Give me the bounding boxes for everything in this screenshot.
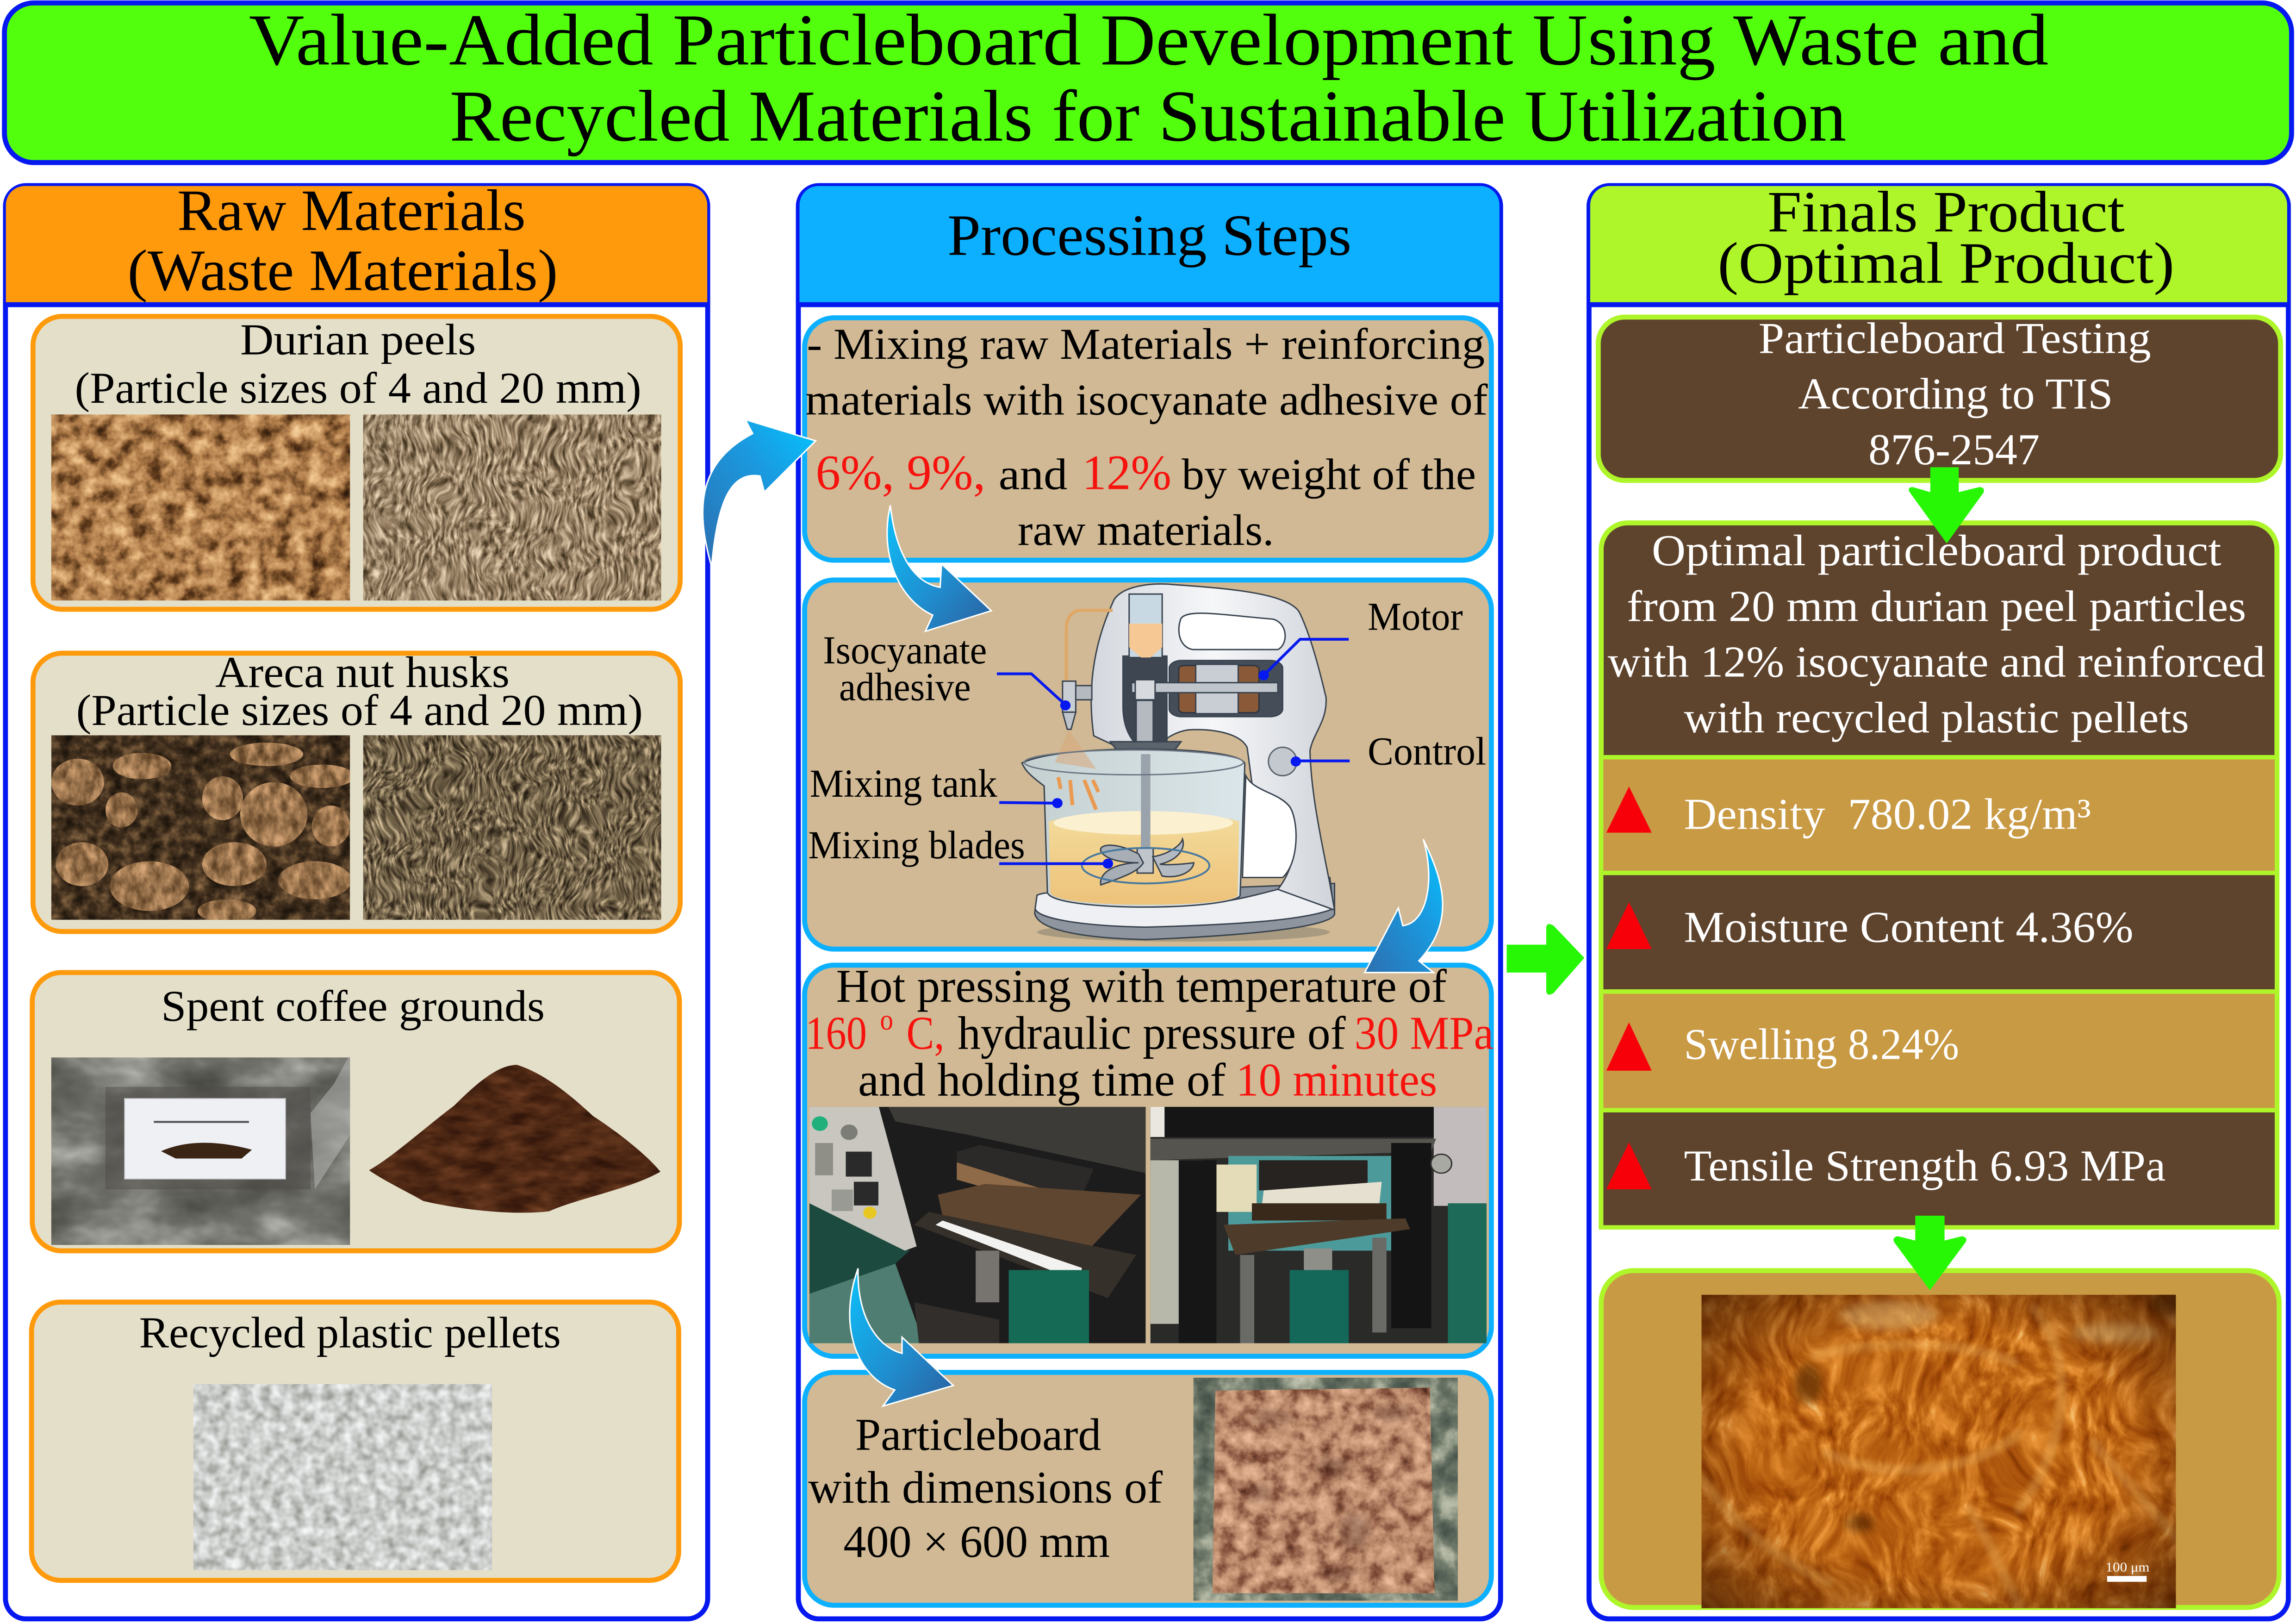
card: particleboard result (805, 1372, 1491, 1605)
mixer labels: adhesive (839, 665, 971, 709)
photo: microstructure (1701, 1290, 2184, 1608)
card: mixing text: - Mixing raw Materials + reinforcing (807, 319, 1485, 369)
card: mixing text: by weight of the (1182, 450, 1476, 499)
card: spent coffee grounds (32, 973, 679, 1251)
particleboard text: Particleboard (855, 1410, 1101, 1460)
card: durian peels: Durian peels (240, 315, 476, 364)
mixer labels: Mixing tank (810, 762, 997, 806)
scale bar: 100 μm (2106, 1561, 2150, 1575)
photo: hot press left (809, 1107, 1145, 1343)
card: mixing text: and (999, 450, 1067, 499)
title banner (5, 0, 2291, 162)
arrow: processing to final product (1507, 924, 1584, 995)
optimal product text: with recycled plastic pellets (1684, 693, 2189, 742)
photo: packaged coffee (51, 1055, 350, 1245)
hot pressing text: 30 MPa (1355, 1007, 1493, 1059)
card: mixing text: 6%, 9%, (815, 445, 985, 500)
hot pressing text: 160 (805, 1007, 867, 1059)
row: tensile strength (1601, 1110, 2277, 1227)
final product header: (Optimal Product) (1717, 231, 2174, 296)
card: testing standard (1598, 313, 2281, 481)
card: areca nut husks: (Particle sizes of 4 and 20 mm) (76, 686, 643, 735)
row: tensile strength: Tensile Strength 6.93 MPa (1684, 1141, 2165, 1190)
row: moisture content: Moisture Content 4.36% (1684, 902, 2134, 951)
final product header: Finals Product (1767, 180, 2125, 244)
photo: durian 4 mm (51, 414, 350, 600)
card: areca nut husks: Areca nut husks (215, 648, 510, 697)
arrow: mixer to hot pressing (1365, 839, 1443, 973)
title text: Recycled Materials for Sustainable Utilization (449, 76, 1847, 157)
optimal product text: from 20 mm durian peel particles (1627, 581, 2246, 631)
arrow: raw materials to processing (703, 419, 815, 567)
arrow: properties to microscope image (1893, 1216, 1966, 1290)
card: mixing text: materials with isocyanate adhesive of (805, 375, 1488, 424)
arrow: testing to optimal product (1909, 467, 1984, 543)
jar (1022, 749, 1245, 907)
mixer labels: Motor (1368, 595, 1463, 638)
row: swelling: Swelling 8.24% (1684, 1019, 1959, 1068)
photo: areca 20 mm (363, 735, 661, 920)
card: optimal product and properties (1601, 523, 2277, 1227)
card: recycled plastic pellets (31, 1302, 679, 1580)
optimal product text (1608, 526, 2265, 742)
arrow: hot pressing to particleboard (850, 1268, 953, 1406)
control knob (1269, 747, 1297, 776)
label lines (997, 639, 1350, 868)
hot pressing text: and holding time of (858, 1054, 1226, 1106)
icon: mixer machine (1022, 584, 1335, 942)
scale bar (2106, 1561, 2150, 1582)
mixer labels (809, 595, 1486, 867)
card: durian peels: (Particle sizes of 4 and 20 mm) (75, 363, 641, 412)
row: swelling (1601, 992, 2277, 1110)
processing steps header: Processing Steps (947, 203, 1351, 268)
card: durian peels (33, 315, 680, 609)
row: density (1601, 757, 2277, 873)
card: mixer diagram (805, 580, 1491, 949)
card: testing standard: According to TIS (1798, 369, 2113, 418)
hot pressing text: 10 minutes (1236, 1054, 1437, 1106)
hot pressing text (805, 960, 1493, 1106)
optimal product text: with 12% isocyanate and reinforced (1608, 637, 2265, 687)
title text (249, 0, 2048, 157)
card: spent coffee grounds: Spent coffee grounds (161, 981, 545, 1031)
hot pressing text: hydraulic pressure of (958, 1007, 1346, 1059)
card: mixing text (805, 318, 1491, 560)
title text: Value-Added Particleboard Development Using Waste and (249, 0, 2048, 81)
optimal product text: Optimal particleboard product (1652, 526, 2221, 575)
card: mixing text: 12% (1082, 445, 1171, 500)
mixer labels: Isocyanate (823, 629, 987, 672)
row: moisture content (1601, 873, 2277, 992)
card: testing standard: 876-2547 (1868, 425, 2040, 474)
photo: coffee pile (369, 1065, 660, 1213)
card: microscope image (1601, 1271, 2279, 1608)
hot pressing text: C, (906, 1007, 945, 1059)
particleboard text: 400 × 600 mm (843, 1517, 1110, 1567)
particleboard text (809, 1410, 1163, 1567)
card: testing standard: Particleboard Testing (1759, 313, 2151, 362)
final product header (1590, 180, 2287, 305)
photo: durian 20 mm (363, 414, 661, 600)
particleboard text: with dimensions of (809, 1463, 1163, 1513)
panel: final product (1589, 180, 2288, 1619)
raw materials header: (Waste Materials) (127, 238, 558, 303)
mixer labels: Control (1368, 730, 1486, 773)
raw materials header: Raw Materials (177, 178, 526, 243)
mixer labels: Mixing blades (809, 824, 1025, 867)
card: recycled plastic pellets: Recycled plastic pellets (139, 1308, 561, 1357)
hot pressing text: Hot pressing with temperature of (836, 960, 1447, 1012)
photo: finished particleboard (1194, 1378, 1458, 1601)
card: areca nut husks (33, 648, 680, 931)
panel: raw materials (6, 178, 708, 1619)
row: density: Density 780.02 kg/m³ (1684, 790, 2091, 839)
card: mixing text: raw materials. (1018, 506, 1274, 555)
panel: processing steps (798, 186, 1500, 1619)
photo: areca 4 mm (51, 735, 355, 923)
hot pressing text: o (880, 1004, 893, 1036)
photo: hot press right (1151, 1107, 1487, 1343)
raw materials header (6, 178, 707, 305)
card: hot pressing (805, 960, 1493, 1356)
photo: plastic pellets (193, 1384, 492, 1570)
processing steps header (800, 186, 1500, 305)
arrow: mixing to mixer (887, 506, 991, 631)
